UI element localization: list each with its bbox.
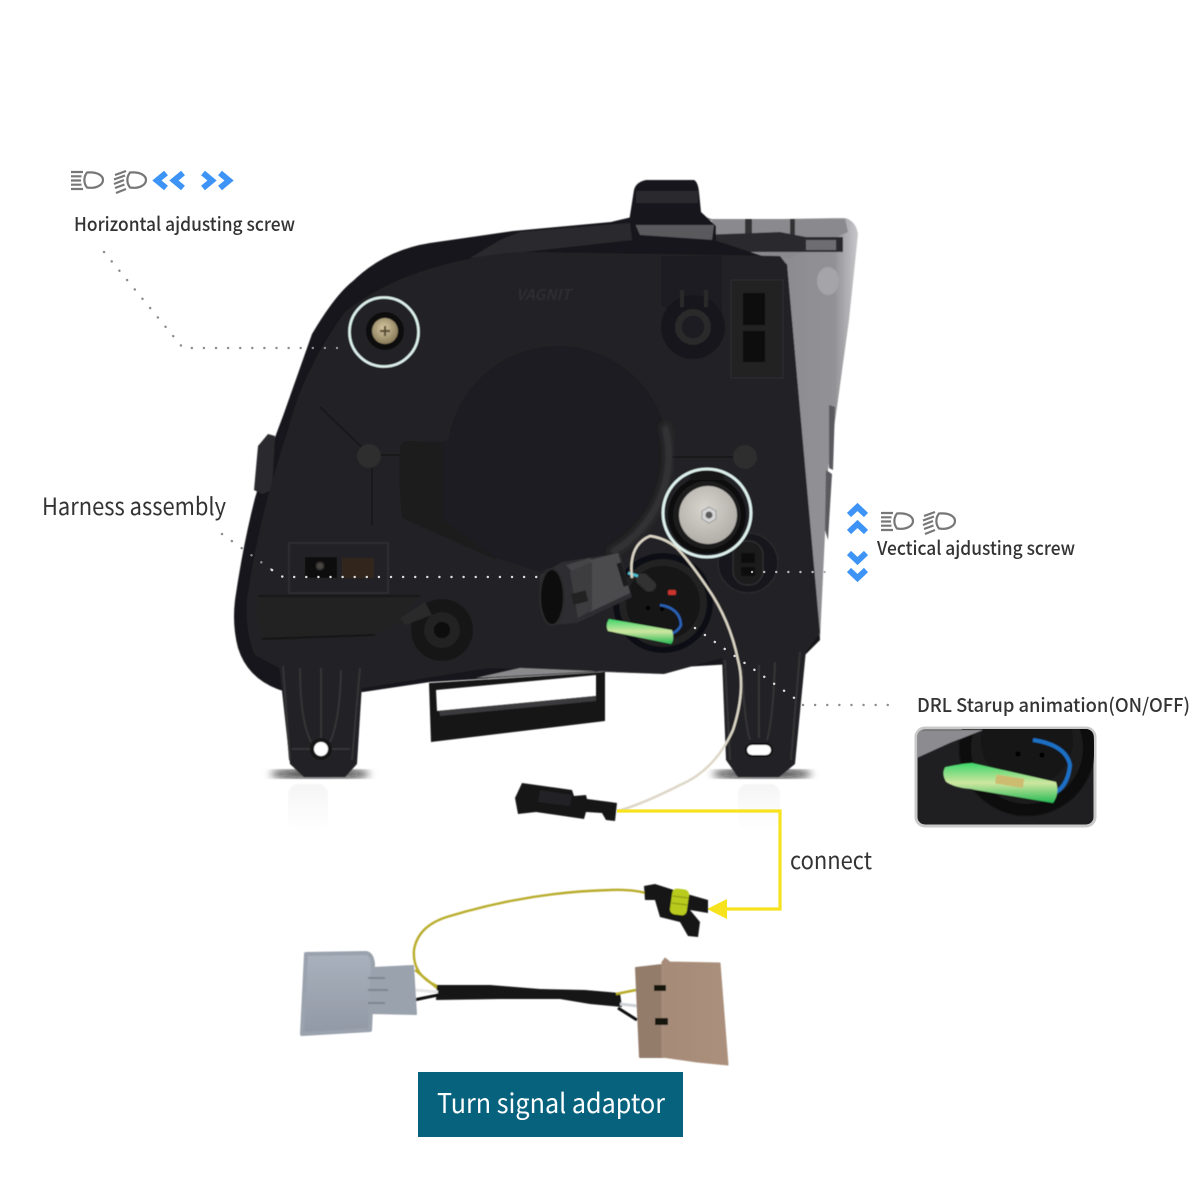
icon: high beam lamp bbox=[881, 513, 913, 530]
label: harness assembly: Harness assembly bbox=[42, 487, 226, 522]
icon: blue right chevrons bbox=[203, 173, 229, 188]
left mounting tab bbox=[279, 664, 363, 777]
icon group: vertical adjustment bbox=[849, 507, 955, 578]
label: DRL startup animation: DRL Starup animation(ON/OFF) bbox=[917, 691, 1190, 718]
turn signal adaptor harness bbox=[302, 884, 728, 1065]
main body bbox=[247, 252, 820, 688]
icon: high beam lamp bbox=[71, 172, 103, 189]
clear lens side bbox=[700, 215, 858, 640]
green tube bbox=[607, 619, 673, 644]
vertical screw disc bbox=[668, 470, 746, 554]
loose wires bbox=[414, 990, 438, 992]
large round cover bbox=[399, 346, 669, 572]
label: horizontal screw: Horizontal ajdusting screw bbox=[74, 210, 295, 237]
icon: blue left chevrons bbox=[157, 173, 183, 188]
embossed logo: VAGNIT bbox=[516, 284, 573, 305]
icon: blue up chevrons bbox=[849, 507, 866, 532]
label: vertical screw: Vectical ajdusting screw bbox=[876, 534, 1075, 561]
icon: blue down chevrons bbox=[849, 553, 866, 578]
icon: low beam lamp bbox=[114, 171, 146, 193]
highlight ring: horizontal screw bbox=[350, 298, 418, 366]
adjuster socket top right bbox=[661, 290, 725, 359]
headlight photo illustration bbox=[234, 180, 858, 832]
outer shell bbox=[234, 217, 820, 692]
harness connector bbox=[540, 553, 638, 625]
small lower-right socket bbox=[718, 533, 778, 593]
small yellow-seal connector bbox=[644, 884, 708, 937]
icon: low beam lamp bbox=[923, 512, 955, 534]
tan connector bbox=[636, 958, 728, 1065]
side clip bbox=[254, 434, 275, 494]
black sleeve bbox=[436, 985, 622, 1007]
ribs and pegs bbox=[320, 407, 757, 525]
dotted leader lines bbox=[104, 252, 888, 705]
label: connect: connect bbox=[790, 841, 872, 876]
blue wire bbox=[660, 605, 681, 634]
main socket bbox=[613, 553, 713, 653]
cream wire bbox=[618, 536, 741, 811]
yellow wire bbox=[414, 890, 646, 986]
bottom bracket bbox=[429, 672, 605, 742]
lower-left panel ridge bbox=[257, 597, 418, 638]
lower-left adjuster bbox=[400, 599, 473, 661]
badge: turn signal adaptor: Turn signal adaptor bbox=[437, 1082, 665, 1121]
inset photo: green connector bbox=[914, 726, 1096, 828]
top notch around adjuster bbox=[661, 256, 722, 330]
reflections under mounting tabs bbox=[270, 770, 812, 832]
vent grille top right bbox=[731, 280, 783, 378]
grey connector bbox=[302, 953, 416, 1034]
highlight ring: vertical screw bbox=[663, 469, 751, 557]
horizontal screw bbox=[366, 312, 404, 350]
right mounting tab bbox=[722, 650, 806, 777]
yellow connect arrow bbox=[617, 811, 780, 919]
vent window bbox=[305, 557, 337, 578]
top tab bbox=[628, 180, 716, 240]
badge: turn signal adaptor bbox=[418, 1072, 683, 1137]
connector plug on lamp wire bbox=[515, 783, 617, 821]
icon group: horizontal adjustment bbox=[71, 171, 229, 193]
lens top ribs bbox=[712, 219, 848, 258]
